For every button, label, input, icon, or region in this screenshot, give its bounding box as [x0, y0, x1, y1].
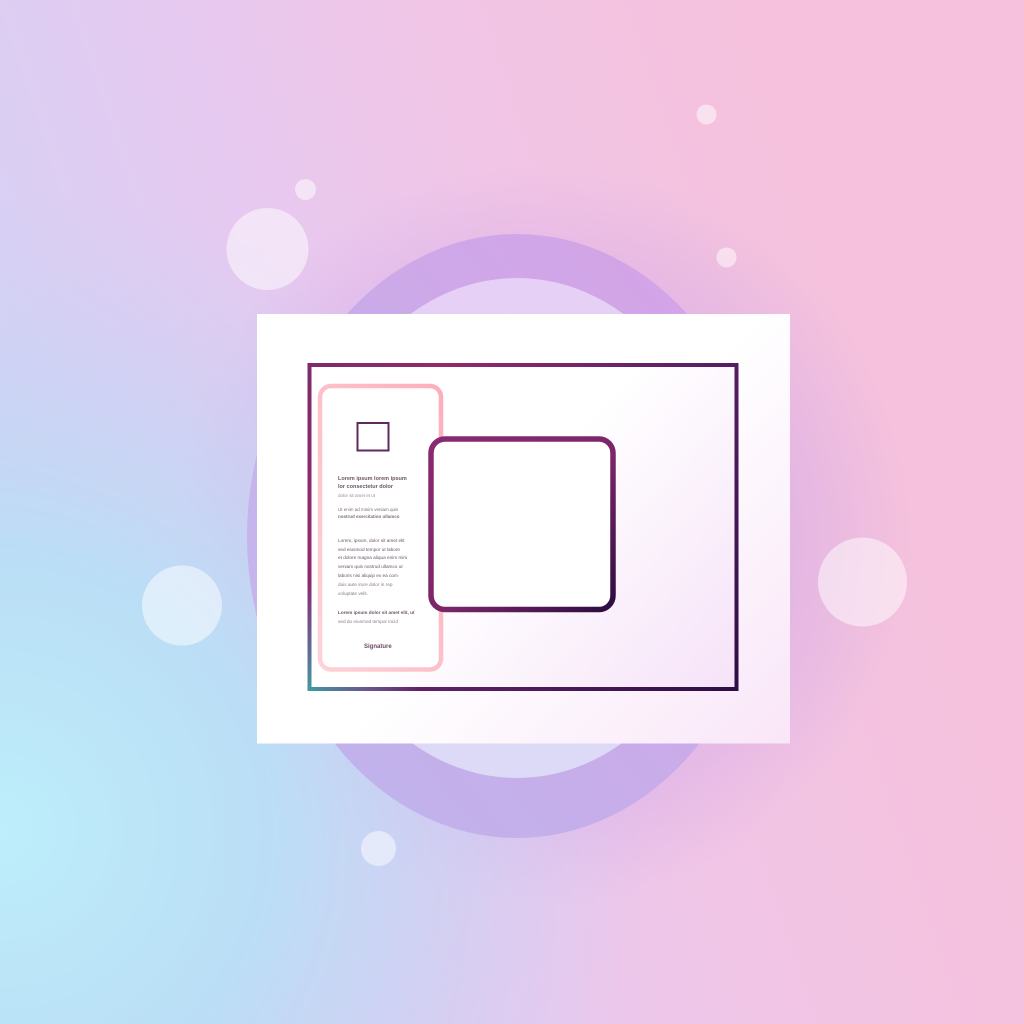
card text: sed eiusmod tempor ut labore [338, 546, 400, 552]
card text: Lorem ipsum dolor sit amet elit, ut [338, 610, 415, 615]
card text: Lorem ipsum lorem ipsum [338, 476, 407, 482]
card text: veniam quis nostrud ullamco ut [338, 564, 403, 569]
card text: Ut enim ad minim veniam quis [338, 507, 398, 512]
white panel [257, 314, 790, 744]
card text: lor consectetur dolor [338, 484, 393, 490]
small square icon [358, 423, 388, 450]
card text: dolor sit amet et ut [338, 493, 375, 498]
card text: nostrud exercitation ullamco [338, 514, 400, 518]
pink text card [320, 386, 441, 670]
card text: laboris nisi aliquip ex ea com [338, 573, 398, 578]
card text: duis aute irure dolor in rep [338, 582, 392, 587]
card text: voluptate velit. [338, 591, 368, 596]
card text: Signature [364, 644, 392, 650]
decorative bubbles [142, 104, 907, 866]
outer frame [310, 365, 736, 689]
inner rounded square [431, 439, 613, 610]
ring behind panel [247, 234, 699, 838]
card text: Lorem, ipsum, dolor sit amet elit [338, 538, 404, 543]
card text: et dolore magna aliqua enim mini [338, 555, 407, 560]
card text: sed do eiusmod tempor incid [338, 618, 398, 624]
